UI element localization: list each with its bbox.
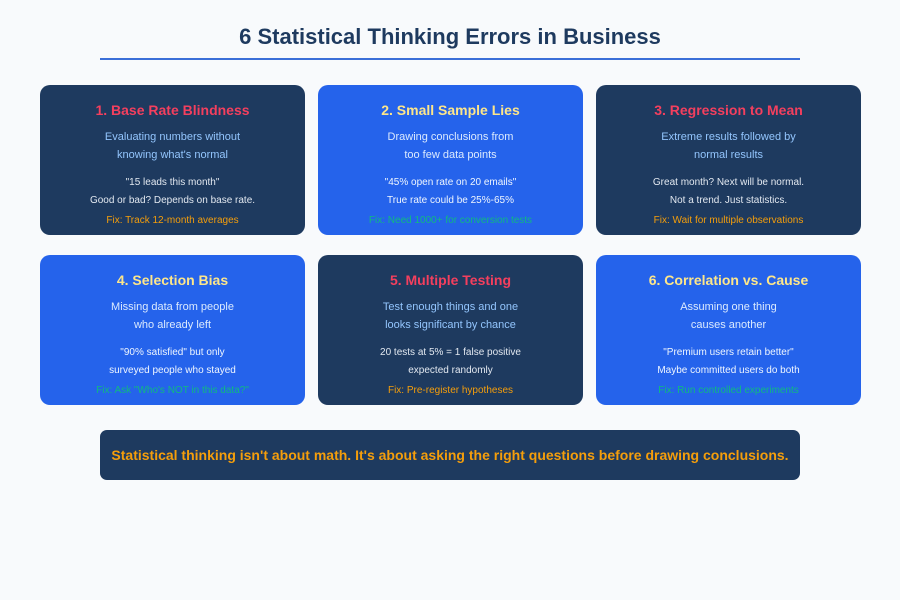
- panel: small sample lies: 2. Small Sample Lies: [381, 102, 520, 118]
- panel: regression to mean: Fix: Wait for multiple observations: [654, 215, 803, 226]
- panel: selection bias: 4. Selection Bias: [117, 272, 228, 288]
- panel: correlation vs cause: Fix: Run controlled experiments: [658, 385, 799, 396]
- panel: correlation vs cause: causes another: [691, 319, 766, 331]
- panel: regression to mean: normal results: [694, 149, 763, 161]
- panel: base rate blindness: Fix: Track 12-month averages: [106, 215, 239, 226]
- panel: regression to mean: 3. Regression to Mean: [654, 102, 803, 118]
- panel: base rate blindness: 1. Base Rate Blindness: [95, 102, 250, 118]
- panel: multiple testing: Fix: Pre-register hypotheses: [388, 385, 513, 396]
- panel: small sample lies: True rate could be 25%-65%: [387, 195, 514, 206]
- panel: selection bias: Missing data from people: [111, 301, 234, 313]
- panel: selection bias: [40, 255, 305, 405]
- panel: small sample lies: "45% open rate on 20 emails": [385, 177, 516, 188]
- panel: small sample lies: Drawing conclusions from: [388, 131, 513, 143]
- panel: base rate blindness: "15 leads this month": [126, 177, 219, 188]
- panel: correlation vs cause: Assuming one thing: [680, 301, 777, 313]
- panel: correlation vs cause: 6. Correlation vs. Cause: [649, 272, 808, 288]
- panel: selection bias: surveyed people who stayed: [109, 365, 236, 376]
- panel: multiple testing: 5. Multiple Testing: [390, 272, 511, 288]
- panel: selection bias: Fix: Ask "Who's NOT in this data?": [96, 385, 249, 396]
- callout banner: Statistical thinking isn't about math. It's about asking the right questions before drawing conclusions.: [111, 447, 789, 463]
- panel: base rate blindness: knowing what's normal: [117, 149, 228, 161]
- panel: correlation vs cause: "Premium users retain better": [663, 347, 794, 358]
- panel: selection bias: "90% satisfied" but only: [120, 347, 225, 358]
- panel: multiple testing: 20 tests at 5% = 1 false positive: [380, 347, 521, 358]
- panel: selection bias: who already left: [134, 319, 211, 331]
- panel: multiple testing: [318, 255, 583, 405]
- panel: base rate blindness: Good or bad? Depends on base rate.: [90, 195, 255, 206]
- panel: base rate blindness: Evaluating numbers without: [105, 131, 240, 143]
- callout banner: [100, 430, 800, 480]
- panel: base rate blindness: [40, 85, 305, 235]
- title: 6 Statistical Thinking Errors in Business: [239, 24, 661, 49]
- panel: correlation vs cause: Maybe committed users do both: [657, 365, 800, 376]
- panel: regression to mean: Extreme results followed by: [661, 131, 796, 143]
- panel: multiple testing: Test enough things and one: [383, 301, 518, 313]
- panel: regression to mean: Not a trend. Just statistics.: [670, 195, 787, 206]
- panel: small sample lies: [318, 85, 583, 235]
- panel: regression to mean: [596, 85, 861, 235]
- panel: correlation vs cause: [596, 255, 861, 405]
- panel: multiple testing: looks significant by chance: [385, 319, 516, 331]
- panel: regression to mean: Great month? Next will be normal.: [653, 177, 804, 188]
- panel: small sample lies: too few data points: [404, 149, 497, 161]
- panel: small sample lies: Fix: Need 1000+ for conversion tests: [369, 215, 532, 226]
- panel: multiple testing: expected randomly: [408, 365, 493, 376]
